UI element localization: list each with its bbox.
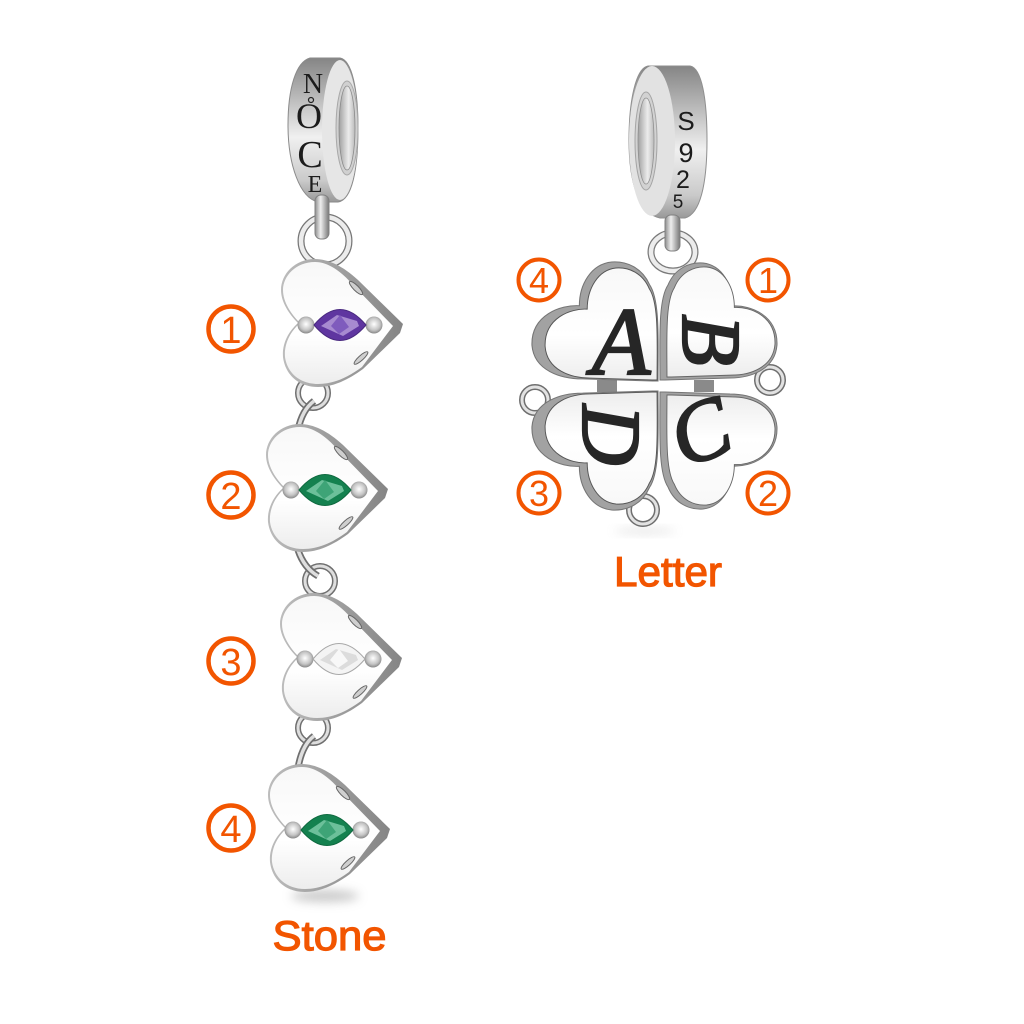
- bead: S925 engraved ring: 9: [678, 138, 694, 168]
- badge: stone 2: [208, 472, 254, 518]
- heart 1 with purple stone: [281, 259, 403, 387]
- badge: letter 3: [518, 472, 560, 514]
- link: heart 3 to heart 4: [298, 713, 328, 768]
- clover leaf: top right with B: [660, 263, 777, 380]
- link: heart 2 to heart 3: [298, 550, 335, 596]
- badge: letter 4: [518, 260, 560, 301]
- shadow under letter charm: [615, 528, 675, 534]
- badge: letter 4: 4: [529, 260, 549, 301]
- clover leaf: bottom right with C: C: [657, 376, 745, 486]
- bead: S925 engraved ring: [629, 66, 707, 218]
- bead: NOCE engraved ring: [288, 58, 358, 202]
- badge: letter 1: 1: [758, 260, 778, 301]
- heart 3 with clear stone: [280, 593, 402, 721]
- badge: letter 2: 2: [758, 473, 778, 514]
- jump ring and connector: [301, 195, 349, 265]
- bead: NOCE engraved ring: E: [308, 172, 322, 198]
- badge: stone 1: [208, 306, 254, 352]
- clover leaf: bottom left with D: D: [564, 404, 657, 465]
- clover leaf: top right with B: B: [664, 314, 757, 366]
- badge: stone 2: 2: [220, 476, 242, 518]
- bead: S925 engraved ring: S: [677, 106, 695, 136]
- bead: NOCE engraved ring: C: [297, 134, 323, 176]
- bead: NOCE engraved ring: O: [296, 96, 322, 136]
- clover leaf: top left with A: A: [586, 288, 651, 395]
- label: Letter: Letter: [614, 548, 722, 595]
- badge: stone 3: [208, 638, 254, 684]
- badge: stone 4: [208, 806, 254, 851]
- side and bottom links: [522, 367, 783, 524]
- shadow under stone charm: [291, 890, 359, 902]
- panel: letter charm: [522, 66, 783, 534]
- jump ring and connector: [651, 215, 695, 271]
- link: heart 1 to heart 2: [298, 378, 328, 430]
- badge: letter 3: 3: [529, 473, 549, 514]
- clover leaf: bottom left with D: [532, 391, 658, 510]
- badge: letter 2: [748, 472, 788, 514]
- heart 4 with green stone: [268, 764, 390, 892]
- heart 2 with green stone: [266, 424, 388, 552]
- panel: stone charm: [266, 58, 403, 902]
- clover leaf: top left with A: [532, 262, 658, 395]
- badge: stone 4: 4: [220, 809, 242, 851]
- badge: stone 3: 3: [220, 642, 242, 684]
- badge: letter 1: [748, 260, 788, 301]
- bead: NOCE engraved ring: N: [303, 69, 323, 100]
- badge: stone 1: 1: [220, 310, 242, 352]
- label: Stone: Stone: [272, 912, 386, 959]
- bead: S925 engraved ring: 2: [676, 166, 690, 194]
- bead: S925 engraved ring: 5: [673, 192, 683, 213]
- clover leaf: bottom right with C: [657, 376, 777, 509]
